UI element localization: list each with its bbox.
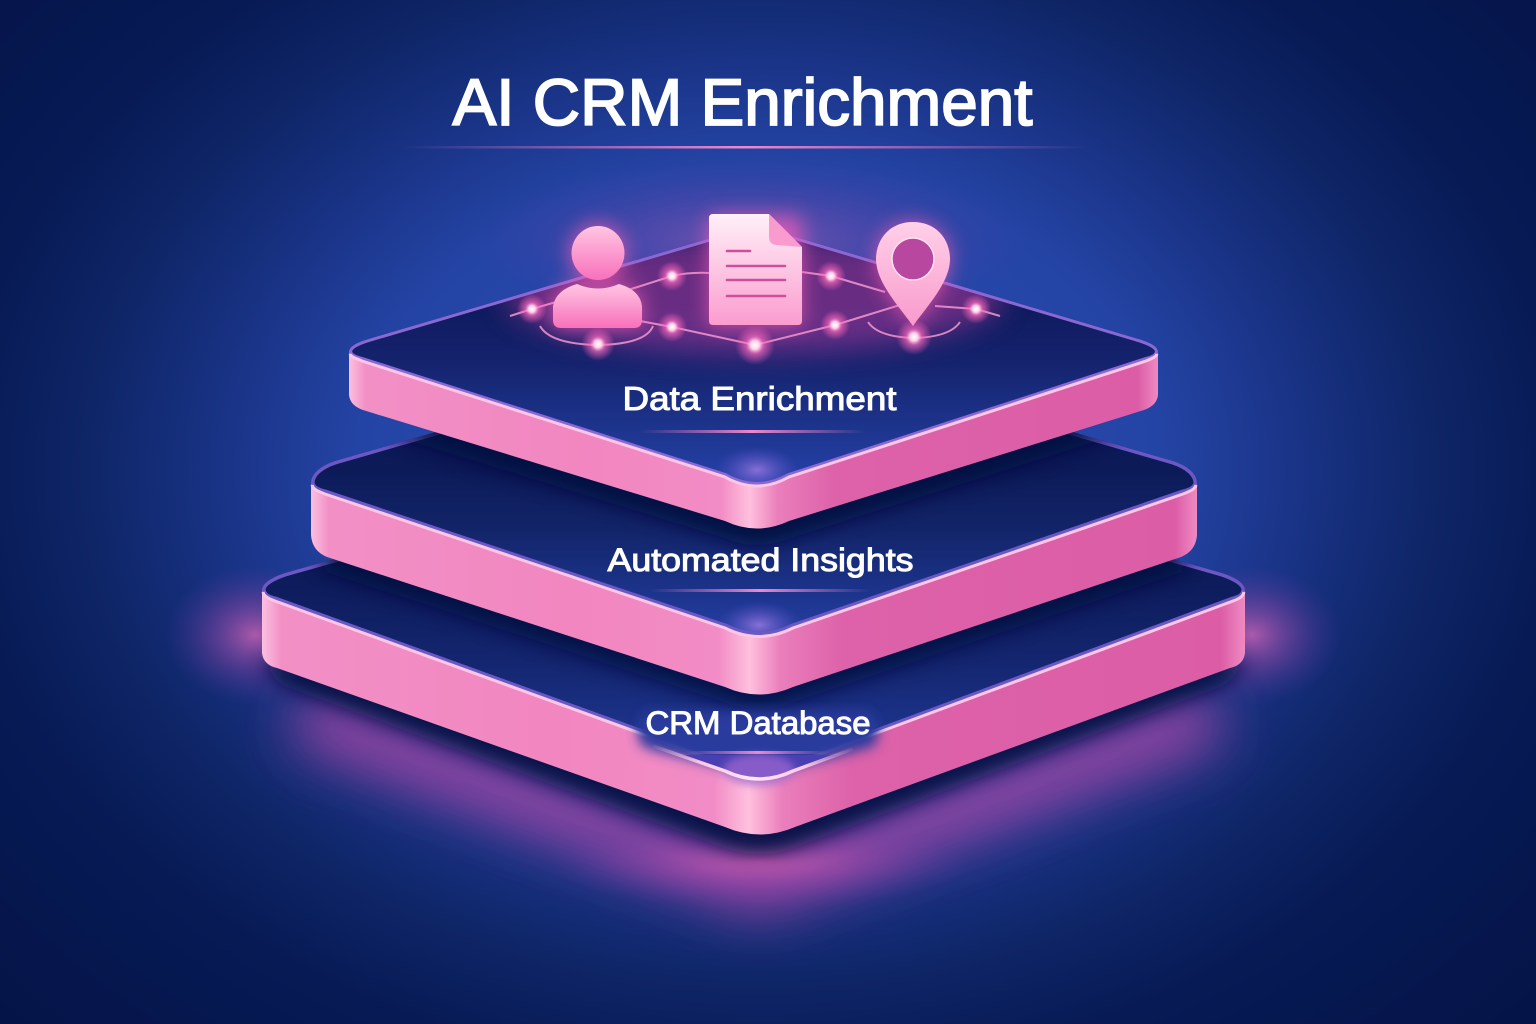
layer 3 top face: [262, 440, 1245, 774]
layer 1 side: [349, 352, 1158, 528]
icon: document: [709, 214, 802, 326]
rule under Data Enrichment: [640, 430, 865, 433]
layer 1 apex glow: [722, 450, 793, 482]
CRM Database label backing: [638, 712, 878, 777]
layer 3 lavender inner band: [262, 559, 1245, 734]
layer 3 side: [262, 590, 1245, 834]
icon: location pin: [876, 222, 950, 326]
network connections: [510, 272, 1000, 345]
layer 1 lavender inner band: [349, 228, 1158, 485]
layer 3: CRM Database: [256, 559, 1251, 869]
title underline: [400, 146, 1090, 148]
layer 2 side: [311, 483, 1197, 694]
rule under Automated Insights: [650, 589, 870, 592]
title: AI CRM Enrichment: [452, 65, 1032, 139]
layer 1: Data Enrichment: [349, 228, 1158, 545]
floor glow: [165, 155, 1342, 910]
layer 1 front rim: [350, 354, 1157, 486]
label: CRM Database: CRM Database: [646, 705, 870, 741]
layer 3 front rim: [263, 592, 1244, 776]
label: Data Enrichment: Data Enrichment: [622, 380, 896, 417]
layer 1 shadow on layer 2: [384, 432, 1124, 554]
layer 1 icon haze: [505, 237, 1005, 353]
layer 3 cast shadow: [262, 660, 1245, 854]
icon: person: [553, 224, 642, 328]
CRM Database front rim: [653, 746, 853, 779]
layer 1 top face: [349, 228, 1158, 485]
layer 2 apex glow: [724, 604, 794, 632]
label: Automated Insights: Automated Insights: [608, 542, 914, 578]
layer 2 lavender inner band: [311, 432, 1197, 635]
layer 2 front rim: [312, 485, 1196, 636]
layer 2 shadow on layer 3: [310, 559, 1198, 713]
layer 2: Automated Insights: [310, 432, 1198, 713]
network nodes: [517, 261, 991, 365]
layer 2 top face: [311, 340, 1197, 636]
CRM Database apex wedge: [653, 746, 853, 786]
rule under CRM Database: [685, 751, 830, 754]
